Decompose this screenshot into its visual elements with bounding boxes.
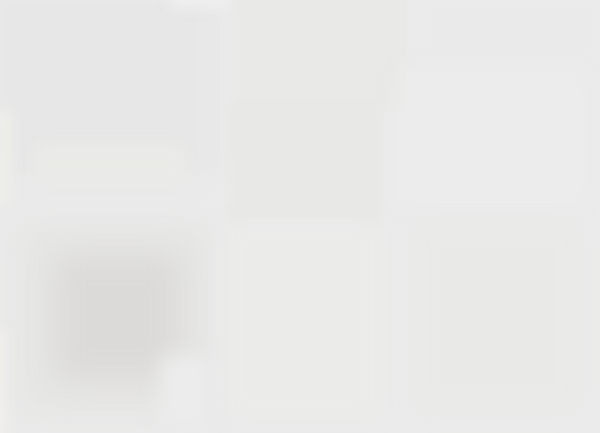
panel: top spot (170, 0, 230, 8)
panel: left edge highlight (0, 110, 12, 205)
panel: top right lower (400, 70, 580, 205)
panel: bottom right (415, 225, 580, 410)
panel: top center (235, 0, 405, 108)
panel: top right (415, 0, 600, 60)
panel: bottom left outer (15, 222, 210, 417)
panel: top center lower (230, 105, 380, 225)
panel: bottom left center (55, 255, 180, 380)
panel: bottom center (222, 225, 382, 415)
panel: top left (0, 0, 220, 175)
panel: bottom left edge (0, 330, 8, 433)
panel: top left lower glow (35, 145, 185, 180)
panel: bottom left cutout (160, 355, 210, 425)
